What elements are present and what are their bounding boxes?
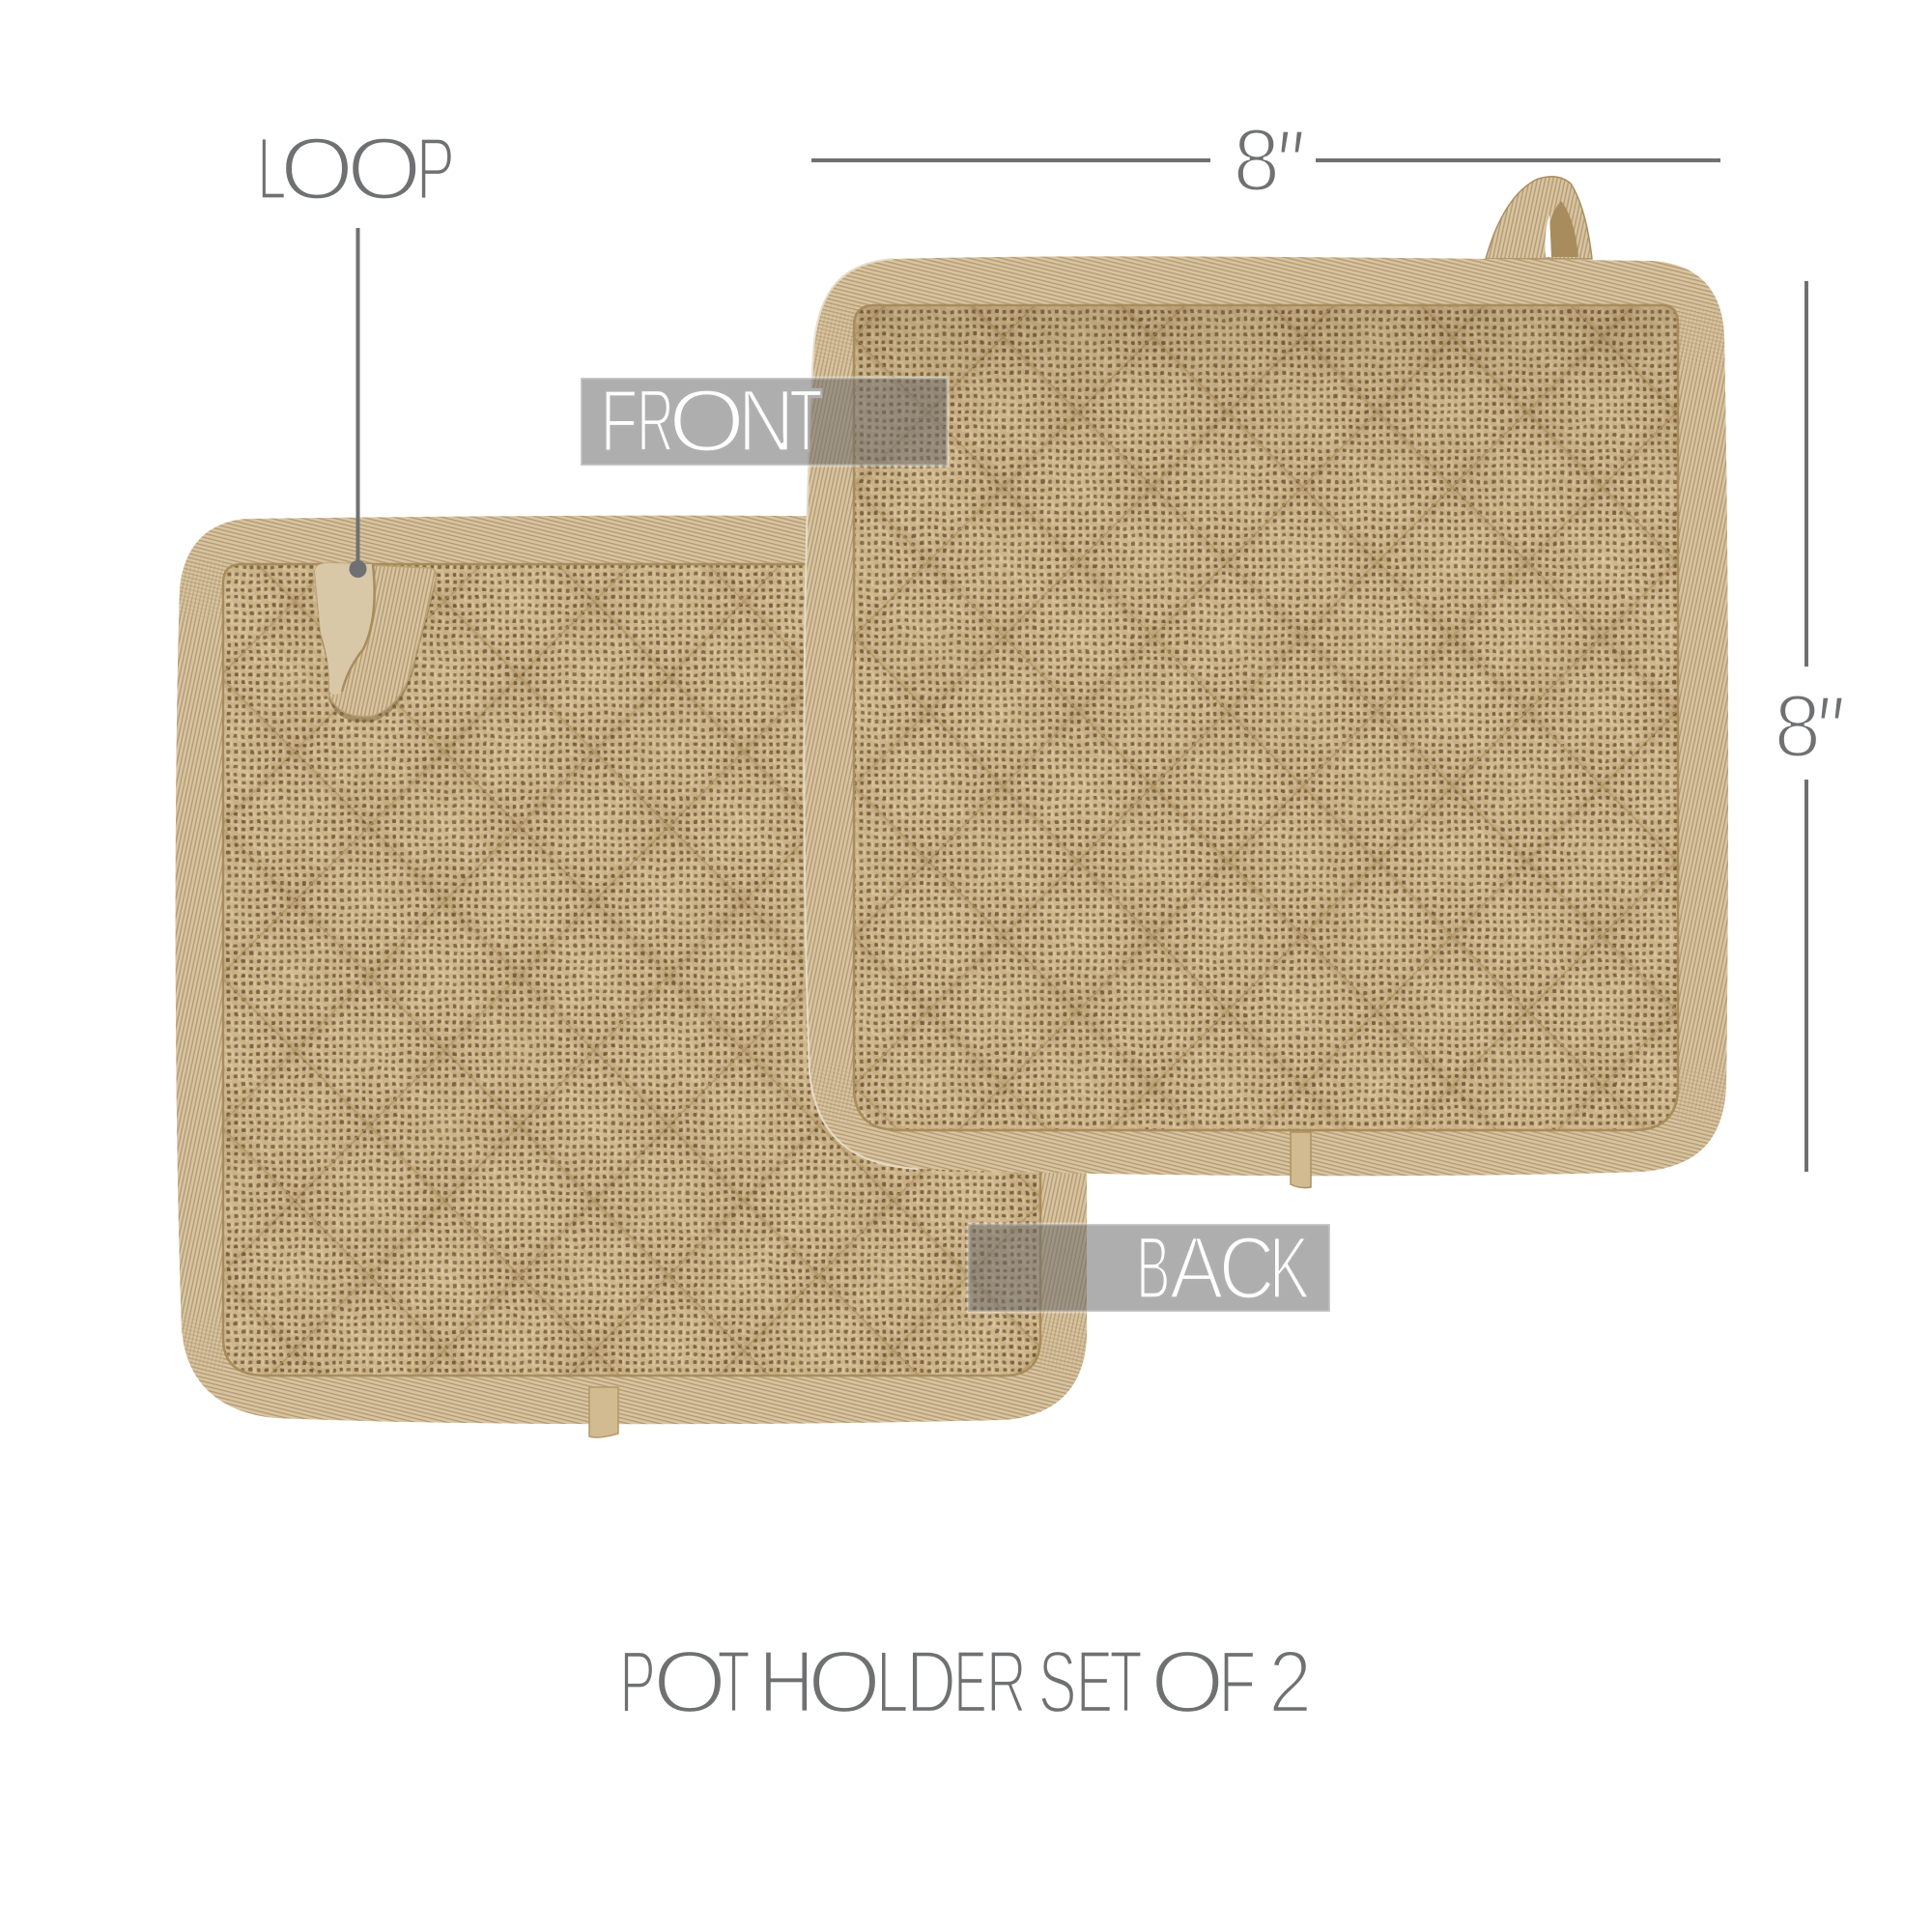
- title: D: [906, 1633, 956, 1731]
- icon: front holder hanging loop: [1486, 177, 1592, 259]
- width line right: [1316, 158, 1720, 162]
- dimension: height 8 inches: [1774, 281, 1844, 1172]
- label: back: [968, 1219, 1330, 1318]
- panel: back pot holder: [164, 502, 1101, 1439]
- back holder quilted burlap face: [213, 551, 1063, 1391]
- title: E: [1076, 1633, 1113, 1731]
- front label text: R: [637, 372, 674, 470]
- width label: ": [1273, 108, 1304, 227]
- title: F: [1218, 1633, 1257, 1731]
- icon: back holder hanging loop: [315, 563, 436, 723]
- title: O: [1151, 1633, 1225, 1731]
- label: front: [581, 372, 948, 470]
- dimension: width 8 inches: [811, 108, 1720, 227]
- back label box: [968, 1224, 1330, 1312]
- back label text: B: [1136, 1219, 1171, 1318]
- title: O: [808, 1633, 881, 1731]
- back label text: K: [1269, 1219, 1310, 1318]
- callout: loop: [257, 120, 455, 578]
- back label text: C: [1219, 1219, 1275, 1318]
- height line bottom: [1804, 780, 1808, 1172]
- front holder quilted burlap face: [840, 290, 1690, 1140]
- front holder binding tab: [1291, 1132, 1311, 1188]
- title: T: [1109, 1633, 1142, 1731]
- loop leader dot: [350, 560, 367, 578]
- front label box: [581, 378, 948, 466]
- front label text: N: [737, 372, 795, 470]
- title: H: [758, 1633, 814, 1731]
- front holder binding light edge: [804, 259, 918, 1169]
- back label text: A: [1169, 1219, 1224, 1318]
- title: E: [953, 1633, 987, 1731]
- loop label: L: [257, 120, 286, 218]
- title: P: [619, 1633, 656, 1731]
- title: 2: [1268, 1633, 1312, 1731]
- back holder inner seam: [223, 564, 1040, 1376]
- title: O: [653, 1633, 726, 1731]
- height label: 8: [1774, 677, 1821, 776]
- loop label: O: [347, 120, 422, 218]
- title: L: [876, 1633, 909, 1731]
- loop label: P: [416, 120, 455, 218]
- title: R: [986, 1633, 1027, 1731]
- title: T: [717, 1633, 750, 1731]
- height line top: [1804, 281, 1808, 667]
- width line left: [811, 158, 1210, 162]
- width label: 8: [1233, 111, 1280, 210]
- front label text: T: [789, 372, 823, 470]
- front label text: O: [668, 372, 746, 470]
- loop leader line: [355, 228, 359, 569]
- loop label: O: [280, 120, 354, 218]
- front holder inner seam: [854, 305, 1678, 1130]
- panel: front pot holder: [792, 177, 1739, 1188]
- back holder binding tab: [589, 1387, 618, 1437]
- front label text: F: [600, 372, 639, 470]
- height label: ": [1813, 674, 1844, 793]
- back holder binding: [164, 502, 1101, 1439]
- title: S: [1038, 1633, 1077, 1731]
- front holder binding: [792, 246, 1739, 1188]
